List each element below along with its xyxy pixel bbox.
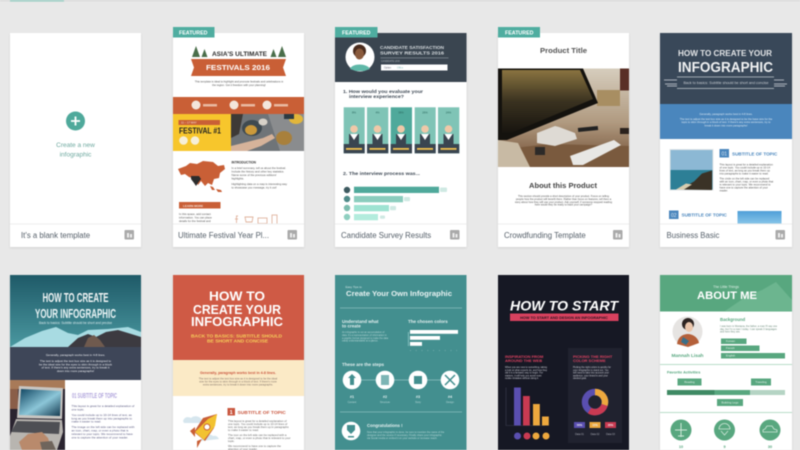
learn more button xyxy=(179,202,220,208)
congratulations: Congratulations ! xyxy=(367,423,403,428)
question 1: 1. How would you evaluate your xyxy=(343,89,423,95)
bar chart xyxy=(506,388,549,426)
featured tag xyxy=(335,27,378,38)
legend chips: Data 03 xyxy=(606,433,615,436)
congratulations xyxy=(342,422,445,440)
navy intro band: down into more paragraphs! xyxy=(57,369,94,373)
create label: infographic xyxy=(60,151,92,158)
blue intro band: break it down into more paragraphs! xyxy=(704,123,748,127)
card: festival template xyxy=(173,27,304,247)
steps timeline: Structure xyxy=(380,401,391,404)
survey bar chart xyxy=(344,187,447,220)
activity icons: 9 xyxy=(723,445,726,449)
survey header: SURVEY RESULTS 2016 xyxy=(380,50,445,55)
section 01: reader. xyxy=(720,188,728,192)
footer label: Business Basic xyxy=(666,231,719,240)
section 01: This layout is great for a detailed explanation of xyxy=(72,404,134,408)
section 01: one to capture the attention of your reader. xyxy=(72,435,128,439)
background section: French xyxy=(726,346,735,350)
legend chips: 15% xyxy=(592,423,598,427)
inspiration text xyxy=(505,354,548,380)
red hero: CREATE YOUR xyxy=(193,303,281,317)
about heading: About this Product xyxy=(529,181,598,190)
dark header: HOW TO CREATE YOUR xyxy=(678,48,773,58)
section 01: of one topic. You could include up to 10-14 xyxy=(720,166,771,170)
section 1: 1 xyxy=(230,410,233,416)
laptop photo xyxy=(10,380,65,450)
section 01: long as you break them up into paragraphs to xyxy=(72,416,132,420)
learn more button: LEARN MORE xyxy=(183,204,203,208)
about paragraph: This section should provide a short description of your product. Focus on telling xyxy=(518,195,609,198)
section 1: topic. xyxy=(228,439,235,443)
introduction text: Include the history and other key statistics. xyxy=(232,170,284,174)
contact text: details for the festival and xyxy=(179,219,211,223)
portrait xyxy=(672,316,702,347)
section 01: lines of text, as long as you break them up xyxy=(720,168,770,172)
congratulations: Now that your infographic is done, be sure to mention the name of the xyxy=(367,431,444,434)
green header: ABOUT ME xyxy=(697,290,757,302)
section 1: to make it easier to read. xyxy=(228,428,259,432)
activity icons: 10 xyxy=(679,445,683,449)
steps timeline: Story xyxy=(415,401,422,404)
section 01: relevant to your topic. We recommend to have xyxy=(72,432,133,436)
favorite activities: Favorite Activities xyxy=(667,370,700,374)
contact text: In this space, add contact xyxy=(179,212,211,216)
card: blank template xyxy=(10,33,141,247)
background section: Background xyxy=(720,317,745,322)
background section: English xyxy=(726,354,736,358)
featured tag xyxy=(498,27,540,38)
color scheme panel: will need to take into account your xyxy=(573,372,609,375)
congratulations: designer and the source if necessary. Finally share your infographic xyxy=(367,434,442,437)
section 02 xyxy=(669,210,782,225)
festival number panel xyxy=(173,114,231,151)
section 01: The image on the left side can be replaced with xyxy=(72,425,135,429)
color scheme panel: Picking the right colors is quickly for xyxy=(573,366,611,369)
navy intro band xyxy=(10,347,141,380)
about paragraph: people how the product will benefit them. Rather than focus on features, tell them a xyxy=(516,197,612,201)
blue intro band: Generally, paragraph works best in 4-8 lines. xyxy=(699,113,753,116)
steps timeline: #2 xyxy=(383,395,387,399)
understand section: easily understandable at a glance. xyxy=(342,340,379,343)
section 01 xyxy=(720,149,778,192)
festival number panel: 11 – 17 MAY xyxy=(181,121,197,125)
favorite activities xyxy=(667,370,785,406)
steps timeline: #1 xyxy=(350,395,354,399)
icon: template badge xyxy=(288,230,297,240)
section 01: into paragraphs to make it easier to read. xyxy=(720,172,769,176)
rating columns: 26% xyxy=(422,110,428,114)
cream intro band: The text to adjust the text box size as it is designed to be the ideal xyxy=(199,378,277,380)
navy intro band: The text to adjust the text box size as it is designed to xyxy=(40,359,111,363)
card: candidate survey xyxy=(335,27,466,247)
section 02: 02 xyxy=(671,213,677,219)
navy intro band: Generally, paragraph works best in 4-8 lines. xyxy=(46,353,105,357)
introduction text: INTRODUCTION xyxy=(232,160,257,164)
food photo xyxy=(231,114,304,151)
rating columns: 8% xyxy=(352,110,357,114)
rating columns xyxy=(344,107,459,153)
activity icons: 30 xyxy=(768,445,772,449)
featured tag xyxy=(173,27,214,38)
legend chips xyxy=(574,422,616,436)
blue intro band: topic to skim through in a block of text. If there's any extra sentences, try to xyxy=(682,120,771,124)
survey header: Option xyxy=(384,67,392,70)
footer label: Candidate Survey Results xyxy=(341,231,431,240)
section 01: make it easier to read. xyxy=(72,420,101,424)
survey header: CANDIDATE SATISFACTION xyxy=(380,45,445,50)
favorite activities: Building Lego xyxy=(722,400,739,404)
red hero: HOW TO xyxy=(209,290,265,304)
card: about me xyxy=(660,275,792,450)
orange stats band xyxy=(173,97,304,114)
footer label: Crowdfunding Template xyxy=(504,231,586,240)
background section: I was born in Montana, the father, a man I'll say one xyxy=(720,325,777,328)
color scheme panel: COLOR SCHEME xyxy=(573,358,606,363)
teal title xyxy=(346,285,452,298)
coast photo xyxy=(670,149,714,190)
understand section xyxy=(342,319,389,343)
color scheme panel: desired goal. xyxy=(573,377,587,380)
icon: template badge xyxy=(124,230,134,240)
understand section: Understand what xyxy=(342,319,379,324)
featured tag: FEATURED xyxy=(342,30,371,36)
contact text: information. You can place xyxy=(179,216,212,220)
navy intro band: be the ideal size for the eyes to skim through in a block xyxy=(39,362,113,366)
section 02: SUBTITLE OF TOPIC xyxy=(682,212,728,218)
blue intro band xyxy=(660,104,792,139)
color scheme panel: your infographic to stand out. You xyxy=(573,369,609,372)
navy intro band: of text. If there's any extra sentences, try to break it xyxy=(42,366,110,370)
background section: day, but I'm a man I today. I can speak 3 languages xyxy=(720,328,778,331)
dark title: HOW TO START xyxy=(510,298,620,314)
section 1: We recommend to have one to capture the xyxy=(228,444,281,448)
color scheme panel: PICKING THE RIGHT xyxy=(573,354,612,359)
background section xyxy=(720,317,785,358)
portrait name: Mannah Lisah xyxy=(672,353,704,359)
section 01: SUBTITLE OF TOPIC xyxy=(732,152,778,156)
understand section: a graphic format designed to make the data xyxy=(342,337,389,340)
question 1 xyxy=(343,89,423,100)
active tab indicator xyxy=(10,0,64,2)
about paragraph: story about how they will use your product. Ask yourself, if someone stopped reading xyxy=(515,200,613,204)
introduction text xyxy=(232,160,288,190)
color scheme panel: audience, your brand is and your xyxy=(573,374,608,377)
card: business basic xyxy=(660,33,792,247)
understand section: to create xyxy=(342,324,361,329)
red hero: BACK TO BASICS: SUBTITLE SHOULD xyxy=(191,334,282,340)
rating columns: 38% xyxy=(398,110,404,114)
product title: Product Title xyxy=(540,48,587,55)
icon: trees xyxy=(192,46,286,57)
section 01: with an icon, chart, map, or even a photo that xyxy=(720,180,774,184)
card: dark infographic xyxy=(498,275,629,450)
social icons xyxy=(235,215,277,224)
section 1 xyxy=(228,408,291,450)
card: teal infographic xyxy=(335,275,466,450)
inspiration text: rookie mistakes without doing it. xyxy=(505,377,539,380)
inspiration text: starters, it will help you avoid most xyxy=(505,374,542,377)
color scheme panel xyxy=(568,348,622,443)
section 1: text, as long as you break them up in paragraphs xyxy=(228,425,289,429)
steps timeline: Content xyxy=(348,401,357,404)
red hero: INFOGRAPHIC xyxy=(191,315,283,329)
mountain hero: Back to basics: Subtitle should be short and precise xyxy=(39,321,112,325)
blue intro band: The text to adjust the text box size as it is designed to be the base size for the xyxy=(680,117,773,121)
card: crowdfunding xyxy=(498,27,629,247)
steps timeline: Design xyxy=(446,401,454,404)
understand section: data. It's a representation of information in xyxy=(342,334,387,337)
colors bar chart: The chosen colors xyxy=(408,319,448,324)
section 01: an icon, chart, map, or even a photo that is xyxy=(72,429,129,433)
survey header: CANDIDATE LINK xyxy=(381,60,400,63)
section 01: 01 SUBTITLE OF TOPIC xyxy=(72,393,117,400)
favorite activities: Reading xyxy=(684,380,695,384)
cream intro band: Generally, paragraph works best in 4-8 lines. xyxy=(200,371,276,375)
legend chips: Data 02 xyxy=(591,433,600,436)
icon: template badge xyxy=(450,230,460,240)
survey header xyxy=(335,33,466,82)
section 01 xyxy=(72,393,135,439)
inspiration text: INSPIRATION FROM xyxy=(505,354,543,359)
activity icons xyxy=(670,420,780,449)
dark header: Back to basics: Subtitle should be short and concise xyxy=(683,81,769,85)
introduction text: to showcase you message, try it out! xyxy=(232,186,277,190)
red hero xyxy=(173,275,304,360)
section 01: You could include up to 10-14 lines of text, as xyxy=(72,413,132,417)
footer label: Ultimate Festival Year Pl... xyxy=(178,231,269,240)
featured tag: FEATURED xyxy=(179,30,208,36)
festival intro: This template is ideal to highlight and promote festivals and celebrations in xyxy=(195,80,283,84)
survey header: Office xyxy=(397,67,404,70)
green header xyxy=(660,275,792,312)
featured tag: FEATURED xyxy=(505,30,534,36)
background section: Korean xyxy=(726,339,735,343)
inspiration text: did it is a fantastic way to begin. For xyxy=(505,372,543,375)
icon: template badge xyxy=(613,230,622,240)
question 1: interview experience? xyxy=(349,94,404,100)
donut chart xyxy=(585,392,605,412)
footer label: It's a blank template xyxy=(21,231,90,240)
icon: template badge xyxy=(776,230,785,240)
red hero: BE SHORT AND CONCISE xyxy=(207,339,269,345)
introduction text: Highlighting data on a map is interesting way xyxy=(232,182,288,186)
ribbon banner: FESTIVALS 2016 xyxy=(206,63,270,72)
inspiration text: When you are new to something, taking xyxy=(505,366,547,369)
mountain hero: YOUR INFOGRAPHIC xyxy=(35,306,116,321)
teal title: Easy Tips to xyxy=(346,285,362,289)
understand section: An infographic is not an accumulation of xyxy=(342,331,384,334)
mountain hero: HOW TO CREATE xyxy=(42,290,109,305)
about paragraph: here would they be ready to back your campaign? xyxy=(535,203,593,207)
steps heading: These are the steps xyxy=(342,362,385,367)
colored dots xyxy=(514,432,550,440)
dark header xyxy=(660,33,792,104)
section 01: 01 xyxy=(722,151,727,157)
section 1: chart, map, or even a photo that is relevant to your xyxy=(228,436,291,440)
section 01: is relevant to your topic. We recommend to xyxy=(720,182,771,186)
introduction text: In a brief summary, tell us about the festival. xyxy=(232,166,286,170)
icon: rocket with clouds xyxy=(183,414,219,448)
desk photo xyxy=(498,68,629,167)
teal title: Create Your Own Infographic xyxy=(346,291,452,298)
rating columns: 24% xyxy=(446,110,452,114)
ribbon banner xyxy=(191,59,286,76)
green header: The Little Things xyxy=(713,285,739,289)
rating columns: 4% xyxy=(375,110,380,114)
section 01: have one to capture the attention of your xyxy=(720,186,768,190)
inspiration text: AROUND THE WEB xyxy=(505,358,542,363)
section 1: SUBTITLE OF TOPIC xyxy=(238,410,286,416)
colors bar chart xyxy=(408,319,458,350)
legend chips: 50% xyxy=(577,423,583,427)
question 2: 2. The interview process was... xyxy=(343,171,420,177)
cream intro band: size for the eyes to skim through in a block of text. If there's more xyxy=(199,380,277,384)
section 1: one topic. You could include up to 10-14 lines of xyxy=(228,422,287,426)
legend chips: 35% xyxy=(608,423,614,427)
background section: and here they are. xyxy=(720,331,741,334)
create label: Create a new xyxy=(56,142,95,149)
congratulations: via Social media or embed it on your website or increase reach. xyxy=(367,437,438,440)
introduction text: Name some of the previous editions' xyxy=(232,173,277,177)
pink subtitle bar: HOW TO START AND DESIGN AN INFOGRAPHIC xyxy=(520,316,608,320)
section 1: This layout is great for a detailed explanation of xyxy=(228,419,287,423)
card: red infographic xyxy=(173,275,304,450)
legend chips: Data 01 xyxy=(575,433,584,436)
section 01: one topic. xyxy=(72,407,85,411)
section 01: The circle on the left side can be replaced xyxy=(720,176,770,180)
dark header: INFOGRAPHIC xyxy=(678,59,773,76)
section 1: The icon on the left side can be replaced with a xyxy=(228,433,287,437)
pink subtitle bar xyxy=(510,314,618,321)
festival intro: the region. Get it freedom with your planning! xyxy=(212,83,266,87)
festival number panel: FESTIVAL #1 xyxy=(179,126,222,135)
festival heading: ASIA'S ULTIMATE xyxy=(212,51,267,58)
asia map xyxy=(178,161,225,192)
section 01: This layout is great for a detailed explanation xyxy=(720,164,773,166)
introduction text: highlights. xyxy=(232,176,244,180)
steps timeline: #3 xyxy=(416,395,420,399)
card: mountain infographic xyxy=(10,275,141,450)
cream intro band xyxy=(173,360,304,396)
favorite activities: Traveling xyxy=(755,380,767,384)
icon: plus button xyxy=(66,112,85,130)
steps timeline xyxy=(343,371,459,404)
steps timeline: #4 xyxy=(448,395,453,399)
cream intro band: extra sentences, try to break it down into more paragraphs. xyxy=(203,382,273,386)
inspiration text: a look at what experts do, and how they xyxy=(505,369,548,372)
mountain hero xyxy=(10,275,141,347)
